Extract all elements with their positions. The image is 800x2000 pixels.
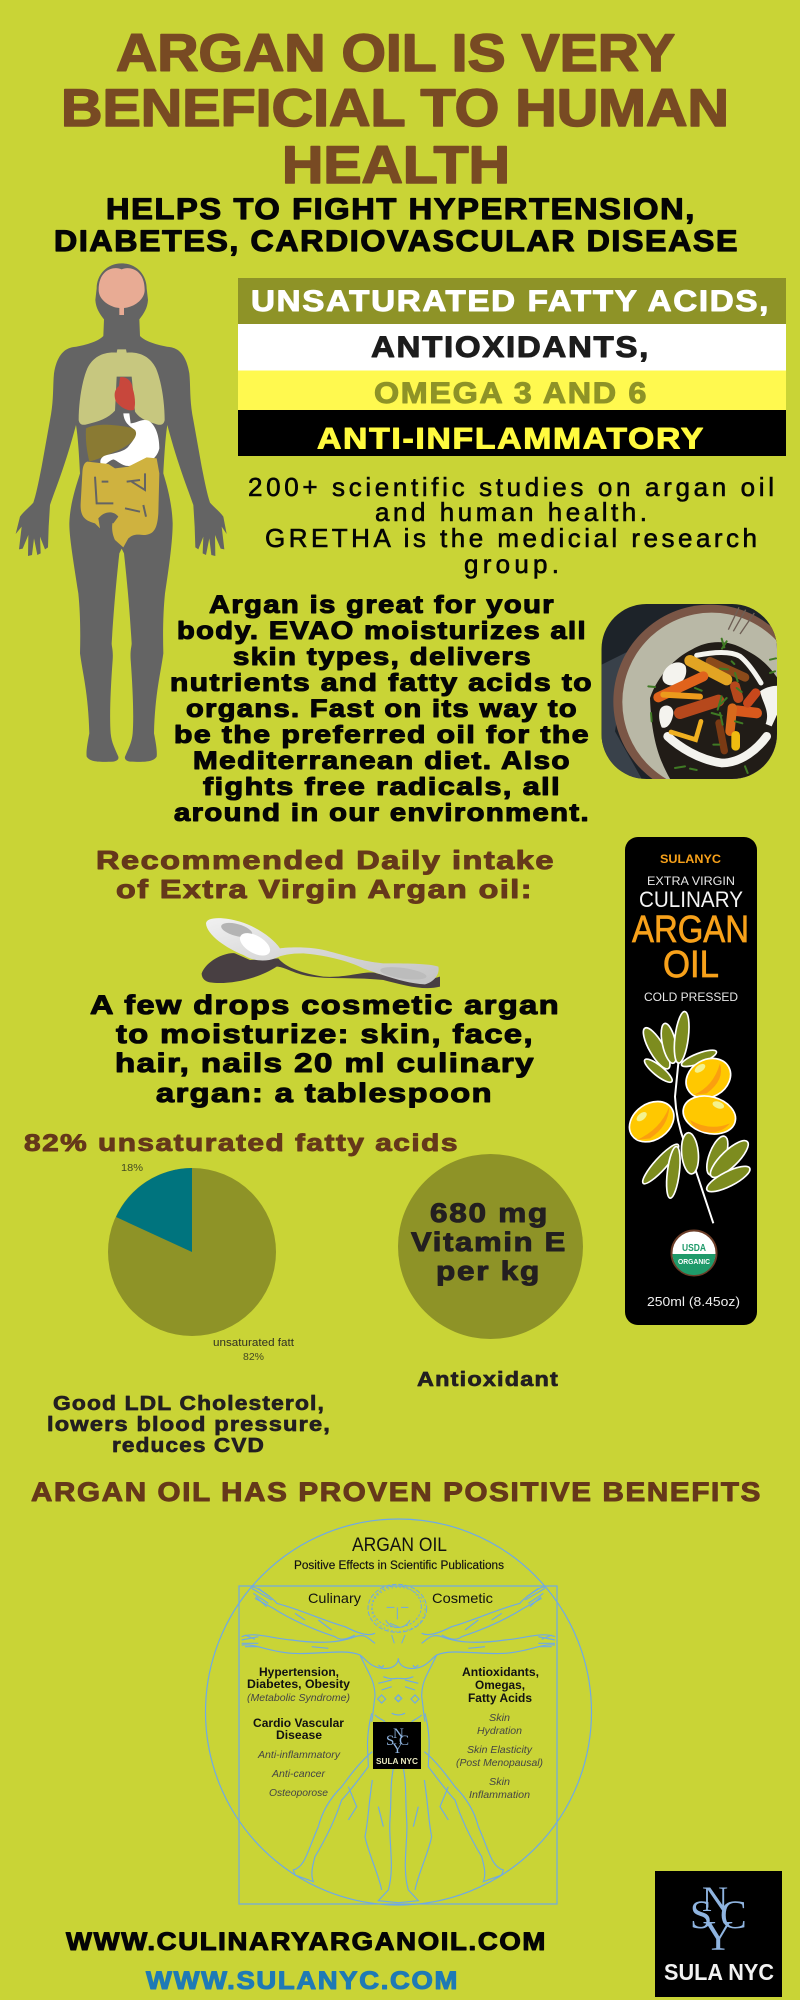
text: culinary effects: Osteoporose [269,1787,328,1799]
subtitle [54,193,739,258]
logo: small Sula NYC: S [386,1733,394,1749]
photo: carrot and lentil dish [602,604,777,779]
text: scientific studies: group. [464,549,559,579]
icon: USDA organic seal: USDA [682,1243,706,1254]
text: scientific studies [248,472,774,579]
circle: vitamin E: per kg [436,1256,541,1286]
text: culinary effects: Cardio Vascular [253,1718,345,1730]
title [61,24,729,195]
text: culinary effects: Disease [276,1730,322,1742]
logo: Sula NYC: N [702,1879,728,1919]
text: cholesterol benefits [47,1393,331,1457]
heading: 82% unsaturated fatty acids: 82% unsaturated fatty acids [24,1130,459,1157]
text: dosage: to moisturize: skin, face, [116,1019,534,1049]
text: cholesterol benefits: lowers blood pressure, [47,1414,331,1436]
text: diagram title: ARGAN OIL [352,1535,447,1556]
subtitle: HELPS TO FIGHT HYPERTENSION, [106,193,696,226]
text: cosmetic effects: Skin [489,1776,510,1788]
circle: vitamin E: 680 mg [430,1198,549,1228]
text: culinary effects: (Metabolic Syndrome) [247,1692,350,1704]
text: argan body benefits: Argan is great for your [209,591,555,619]
icon: liver [86,425,142,462]
title: HEALTH [282,136,510,195]
bar: anti-inflammatory: ANTI-INFLAMMATORY [317,422,705,456]
title: BENEFICIAL TO HUMAN [61,79,729,138]
text: culinary effects: Anti-inflammatory [257,1749,341,1761]
bottle label: culinary argan oil: OIL [663,944,719,986]
text: scientific studies: GRETHA is the medicial research [265,523,757,553]
text: dosage: argan: a tablespoon [156,1078,493,1108]
logo: small Sula NYC: C [399,1733,409,1749]
text: diagram title: Positive Effects in Scientific Publications [294,1560,504,1572]
bottle label: culinary argan oil: SULANYC [660,852,721,866]
pie chart: unsaturated fats: 82% [243,1351,264,1363]
text: dosage: hair, nails 20 ml culinary [115,1048,535,1078]
pie chart: unsaturated fats: 18% [121,1163,143,1174]
text: cosmetic effects: Skin [489,1712,510,1724]
logo: small Sula NYC [373,1722,421,1769]
text: argan body benefits: body. EVAO moisturizes all [177,617,587,645]
bar: unsaturated fatty acids: UNSATURATED FATTY ACIDS, [251,285,770,318]
text: cholesterol benefits: Good LDL Cholesterol, [53,1393,325,1415]
heading: recommended daily intake: of Extra Virgin Argan oil: [116,874,533,904]
icon: lungs [79,349,165,425]
title: ARGAN OIL IS VERY [116,24,675,83]
text: argan body benefits: skin types, delivers [233,643,532,671]
text: cosmetic effects: Skin Elasticity [467,1744,533,1756]
icon: spoon with shadow [202,918,440,988]
icon: human body with organs [16,263,227,762]
text: argan body benefits: organs. Fast on its way to [186,695,578,723]
footer: website culinaryarganoil: WWW.CULINARYARGANOIL.COM [66,1928,547,1956]
text: cosmetic effects: Inflammation [469,1789,530,1801]
text: cosmetic effects: Fatty Acids [468,1693,532,1705]
text: dosage: A few drops cosmetic argan [90,990,560,1020]
icon: USDA organic seal: ORGANIC [678,1257,711,1266]
icon: intestines [81,457,159,547]
text: cosmetic effects [456,1667,543,1801]
icon: USDA organic seal [672,1230,716,1276]
bottle label: culinary argan oil: ARGAN [632,909,749,951]
logo: Sula NYC [655,1871,782,1997]
bottle label: culinary argan oil: CULINARY [639,887,743,912]
logo: Sula NYC: SULA NYC [664,1959,774,1985]
text: diagram title [294,1535,504,1606]
logo: Sula NYC: Y [703,1914,733,1960]
icon: argan branch with fruit [622,1011,753,1223]
text: cholesterol benefits: reduces CVD [112,1435,265,1457]
text: argan body benefits [170,591,593,827]
text: argan body benefits: nutrients and fatty acids to [170,669,593,697]
text: cosmetic effects: Hydration [477,1725,522,1737]
nutrient bars [238,278,786,456]
pie chart: unsaturated fats: unsaturated fatt [213,1337,294,1349]
bar: antioxidants: ANTIOXIDANTS, [371,331,650,364]
icon: heart [115,377,135,410]
circle: vitamin E: Vitamin E [411,1227,567,1257]
bottle label: culinary argan oil: EXTRA VIRGIN [647,874,735,888]
footer: website sulanyc: WWW.SULANYC.COM [146,1967,459,1995]
pie chart: unsaturated fats [108,1163,294,1363]
text: diagram title: Cosmetic [432,1590,493,1606]
subtitle: DIABETES, CARDIOVASCULAR DISEASE [54,225,739,258]
text: culinary effects: Diabetes, Obesity [247,1679,351,1691]
icon: stomach [100,413,159,466]
icon: brain [99,268,145,315]
label: antioxidant: Antioxidant [417,1369,559,1391]
logo: small Sula NYC: SULA NYC [376,1756,418,1766]
text: culinary effects: Hypertension, [259,1667,339,1679]
text: argan body benefits: around in our environment. [174,799,590,827]
bottle label: culinary argan oil: 250ml (8.45oz) [647,1294,740,1309]
text: diagram title: Culinary [308,1590,361,1606]
text: scientific studies: and human health. [375,497,647,527]
bottle label: culinary argan oil: COLD PRESSED [644,990,738,1004]
text: cosmetic effects: Omegas, [475,1680,525,1692]
text: scientific studies: 200+ scientific studies on argan oil [248,472,774,502]
heading: proven positive benefits: ARGAN OIL HAS PROVEN POSITIVE BENEFITS [31,1477,762,1507]
text: argan body benefits: Mediterranean diet. Also [193,747,571,775]
logo: small Sula NYC: Y [392,1741,403,1757]
text: argan body benefits: fights free radicals, all [203,773,561,801]
diagram: Vitruvian man [206,1519,592,1905]
heading: recommended daily intake: Recommended Daily intake [96,845,555,875]
text: dosage [90,990,560,1108]
text: argan body benefits: be the preferred oil for the [174,721,590,749]
logo: Sula NYC: S [690,1892,712,1937]
bottle label: culinary argan oil [622,837,757,1325]
icon: figure line drawing [242,1584,555,1903]
text: culinary effects [247,1667,351,1799]
text: cosmetic effects: Antioxidants, [462,1667,539,1679]
circle: vitamin E [398,1154,583,1339]
logo: small Sula NYC: N [393,1726,404,1742]
text: cosmetic effects: (Post Menopausal) [456,1757,543,1769]
bar: omega 3 and 6: OMEGA 3 AND 6 [374,377,648,410]
logo: Sula NYC: C [720,1892,747,1937]
heading: recommended daily intake [96,845,555,904]
text: culinary effects: Anti-cancer [271,1768,325,1780]
